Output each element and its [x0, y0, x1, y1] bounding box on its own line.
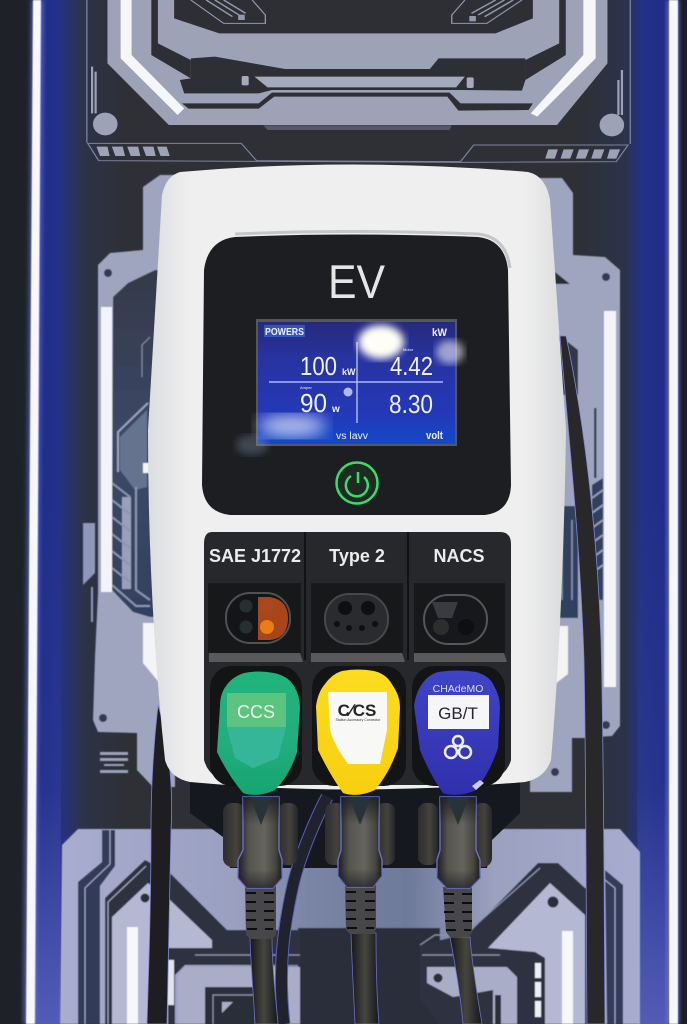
screen readouts: Motor	[403, 347, 414, 352]
bottom circuit panel graphic	[60, 829, 640, 1024]
connector panel: NACS	[433, 546, 485, 566]
rear cable middle	[281, 797, 327, 1024]
charger body	[148, 164, 566, 790]
side circuit panel left	[83, 175, 175, 787]
screen readouts: kW	[342, 367, 356, 377]
brand logo EV: EV	[328, 255, 386, 308]
rear cable left	[147, 705, 172, 1024]
screen readouts: vs lavv	[336, 431, 368, 442]
screen readouts: volt	[426, 430, 443, 442]
screen readouts: 90	[300, 388, 327, 418]
connector labels: SAE J1772	[209, 546, 301, 566]
LED strip left	[23, 0, 44, 1024]
screen readouts: 4.42	[390, 351, 433, 381]
screen readouts: kW	[432, 327, 448, 339]
screen readouts	[264, 325, 448, 442]
screen glare	[358, 325, 404, 359]
side circuit panel right	[530, 178, 620, 792]
right chevron trace	[605, 870, 623, 1024]
blue handle logo	[445, 736, 471, 758]
blue handle cover	[414, 670, 500, 795]
charging handle: GB/T blue: CHAdeMO	[433, 683, 483, 695]
top circuit panel graphic	[87, 0, 630, 162]
screen readouts: Amper	[300, 385, 312, 390]
charging handle: CCS yellow: Station Accessory Connector	[336, 718, 381, 722]
charging handle: CCS green	[217, 672, 300, 1024]
LED strip right	[666, 0, 680, 1024]
screen readouts: POWERS	[265, 327, 304, 338]
socket: Type 2	[311, 583, 405, 662]
charging handle: GB/T blue	[414, 670, 500, 1024]
charging handle: CCS yellow: C∕CS	[338, 701, 376, 720]
screen readouts: w	[331, 404, 340, 415]
power button	[336, 462, 378, 504]
yellow handle cover	[316, 670, 400, 795]
charging handle: CCS green: CCS	[237, 702, 275, 722]
small vent icon	[100, 752, 128, 773]
screen readouts: 8.30	[389, 389, 433, 419]
screen readouts: 100	[300, 351, 337, 381]
left chevron trace	[105, 860, 300, 1024]
rear cable right	[560, 336, 605, 1024]
green handle cover	[217, 672, 300, 795]
socket: NACS	[414, 583, 507, 662]
charger mounting bracket	[190, 780, 520, 868]
charging handle: GB/T blue: GB/T	[438, 704, 478, 723]
display panel	[202, 232, 511, 515]
LCD screen	[236, 319, 464, 455]
charging handle: CCS yellow	[316, 670, 400, 1024]
connector panel: Type 2	[329, 546, 385, 566]
socket: SAE J1772	[208, 583, 303, 662]
connector panel	[204, 532, 511, 786]
